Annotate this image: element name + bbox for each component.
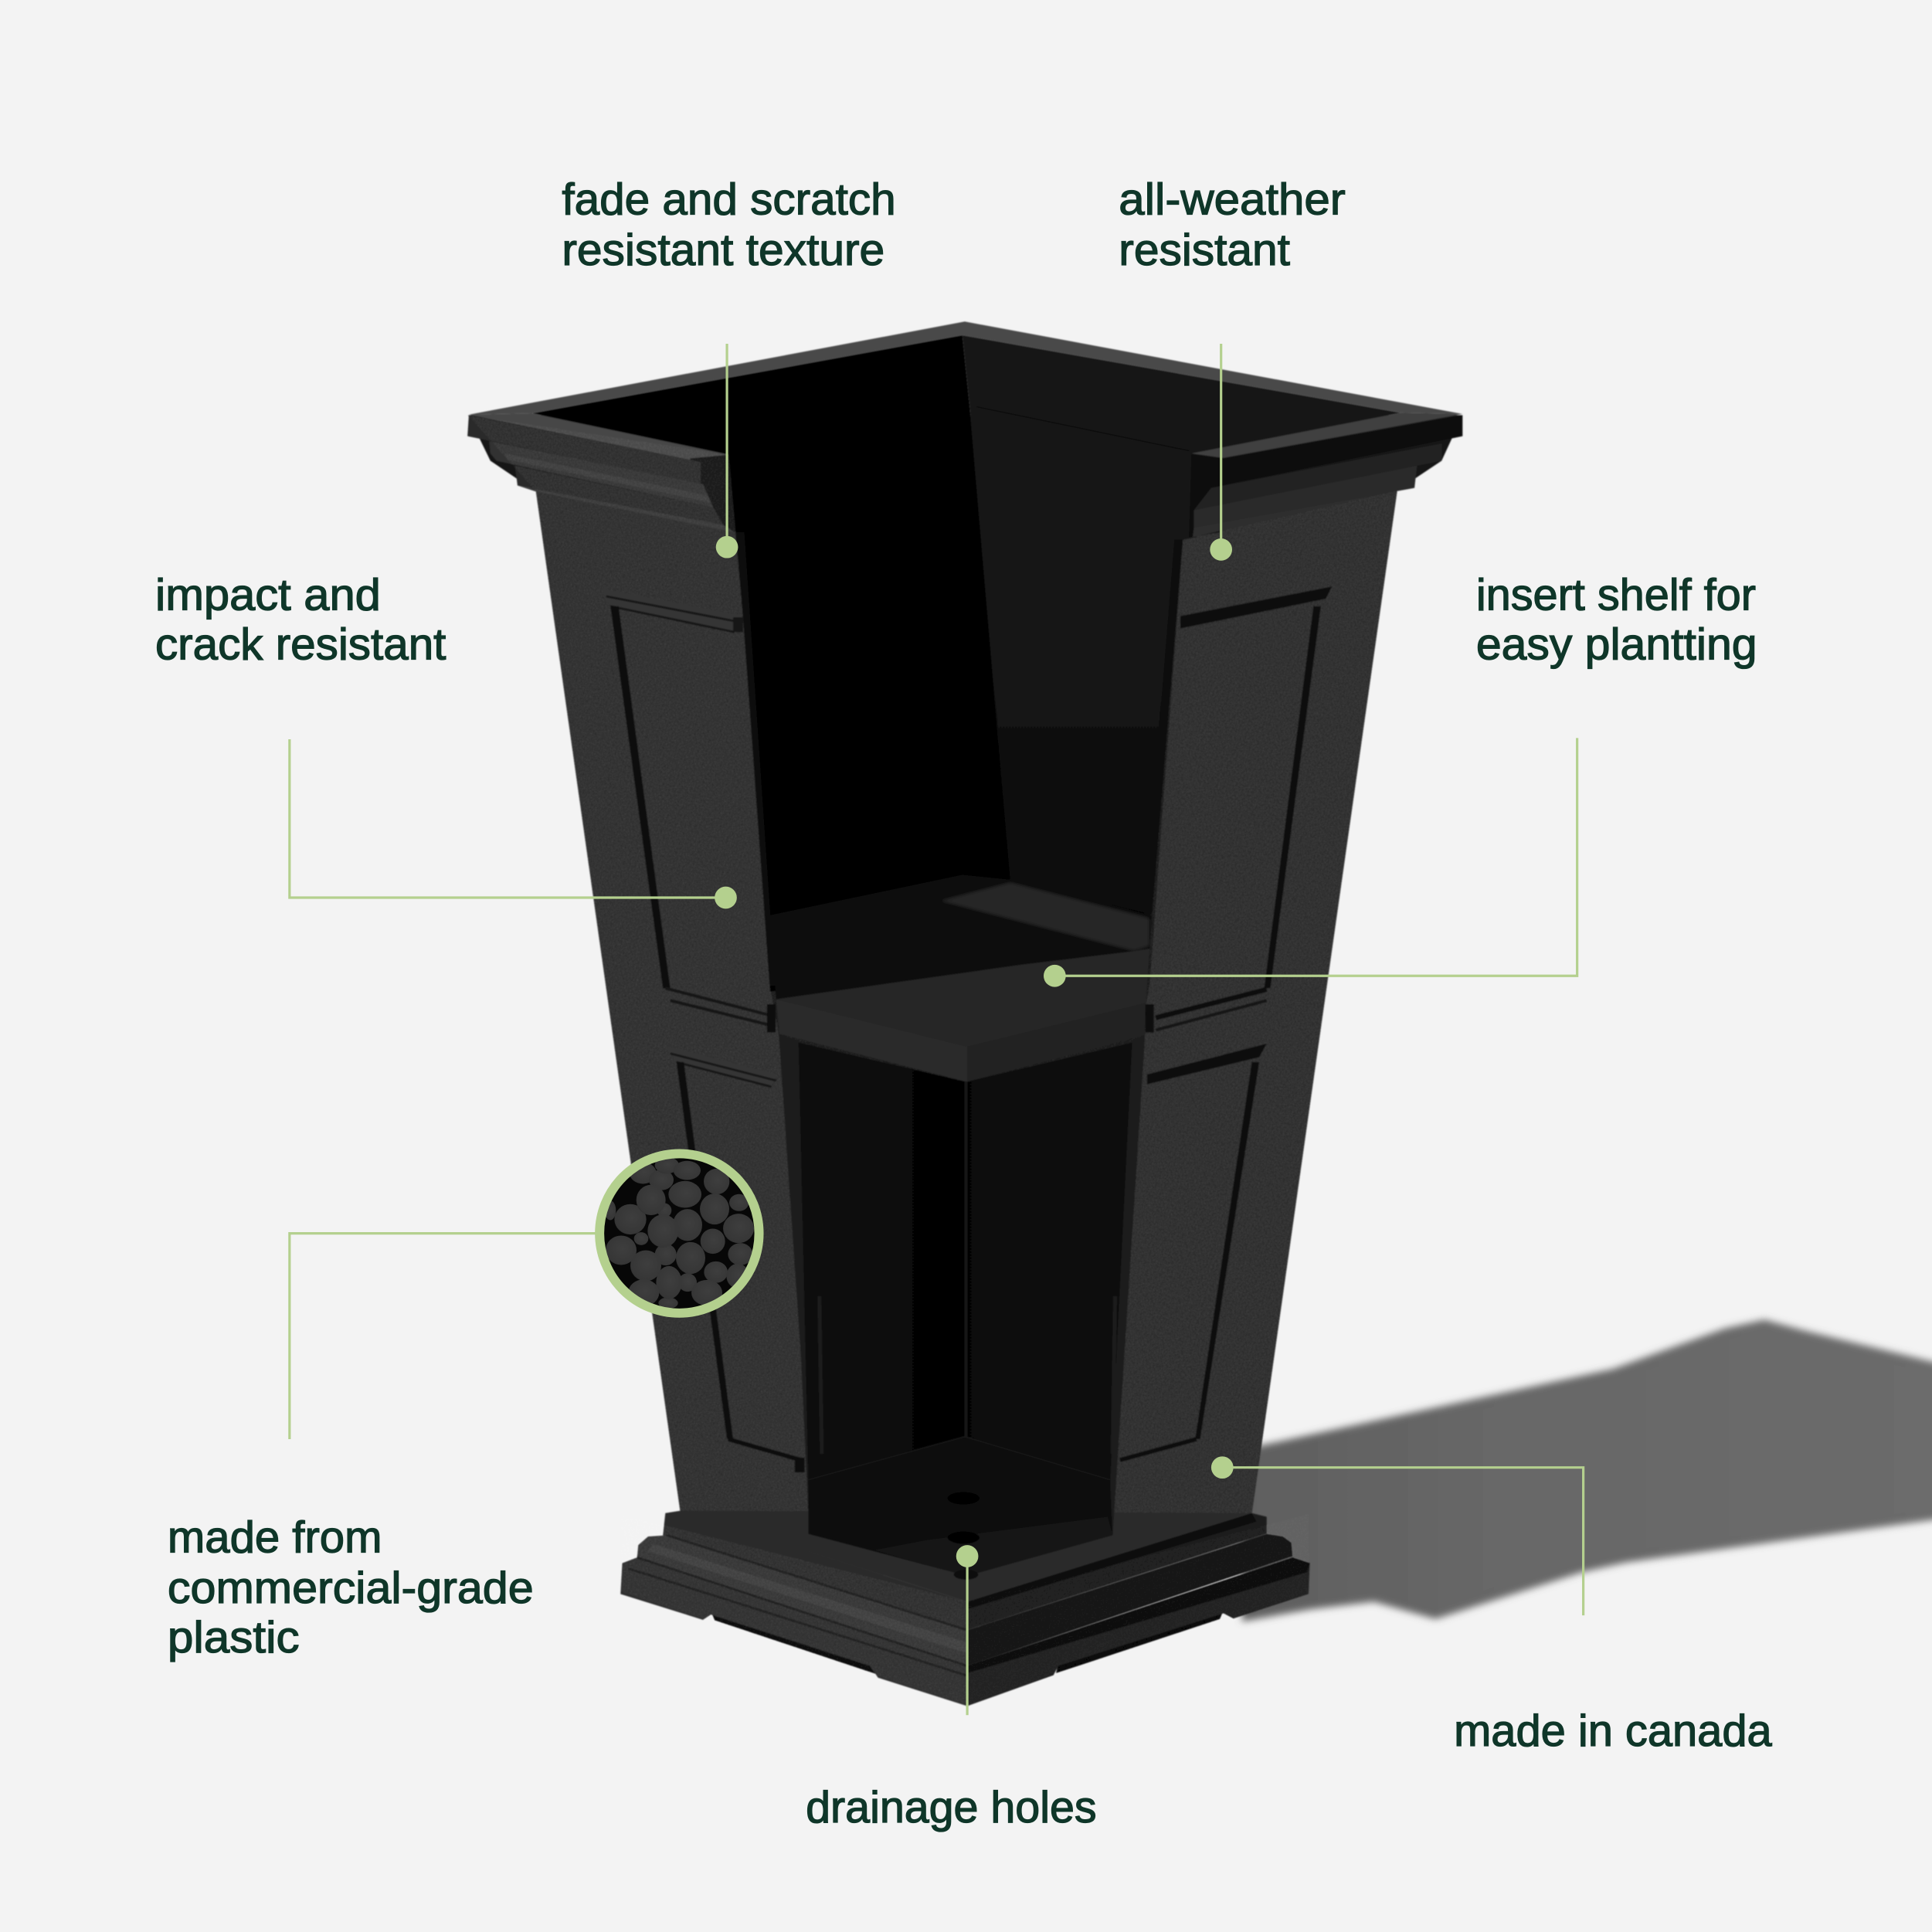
callout: insert shelf (1044, 571, 1757, 987)
groove (1195, 1062, 1259, 1439)
base right tier 2 (967, 1534, 1292, 1665)
callout: drainage holes (806, 1545, 1097, 1832)
lower interior (779, 1034, 1145, 1580)
shelf notches (771, 1004, 1149, 1033)
rim left top (469, 413, 728, 462)
lower cut edge right (1110, 1035, 1145, 1535)
dot (1044, 965, 1066, 987)
bottom lines (1156, 990, 1267, 1017)
label: resistant (1119, 226, 1290, 275)
lower back left wall (799, 1042, 966, 1485)
base right tier 1 (967, 1513, 1267, 1630)
label: fade and scratch (562, 175, 896, 225)
leader line (1054, 738, 1577, 976)
rim right top (1191, 413, 1462, 463)
label (562, 175, 896, 275)
shelf top shadowed (769, 874, 1152, 1047)
leader line (1221, 344, 1222, 549)
left cut edge (735, 532, 775, 986)
callout: commercial-grade plastic (168, 1153, 759, 1662)
leader line (726, 344, 728, 547)
shelf front left edge (776, 1000, 967, 1081)
moulding left (489, 441, 714, 508)
left upper panel (601, 589, 770, 1025)
vertical ribs (820, 1296, 1115, 1454)
drainage hole back (948, 1492, 980, 1505)
rim right cut profile (1189, 453, 1226, 537)
rim grain (468, 416, 735, 532)
bottom lines (665, 988, 770, 1025)
label: drainage holes (806, 1783, 1097, 1832)
rail (601, 589, 741, 632)
groove (677, 1062, 733, 1439)
cavity floor (808, 1437, 1112, 1576)
callout: impact and crack resistant (155, 571, 737, 908)
rim left cut profile (690, 455, 735, 532)
right cut edge (1145, 540, 1183, 915)
cast shadow (1242, 1319, 1932, 1621)
label: easy plantting (1476, 620, 1757, 669)
base left tier 2 (637, 1535, 967, 1665)
dot (716, 536, 738, 559)
interior left dark wall (532, 335, 1152, 992)
leader line (966, 1557, 968, 1715)
label: resistant texture (562, 226, 885, 275)
dot (1211, 1456, 1234, 1479)
label (168, 1513, 534, 1662)
rim back top (469, 321, 1462, 415)
leader line (290, 739, 725, 898)
bottom lines (728, 1439, 801, 1460)
label: commercial-grade (168, 1564, 534, 1613)
rail (1147, 1044, 1267, 1085)
label: all-weather (1119, 175, 1346, 225)
moulding right (1194, 443, 1441, 510)
leader line (290, 1234, 596, 1439)
callout: fade and scratch resistant texture (562, 175, 896, 559)
label (1476, 571, 1757, 669)
dot (956, 1545, 978, 1567)
label: crack resistant (155, 620, 446, 669)
base left tier 1 (663, 1511, 967, 1630)
shelf front right edge (967, 1003, 1146, 1081)
label (1119, 175, 1346, 275)
magnified pellets lens (599, 1153, 759, 1313)
body: left face (536, 491, 967, 1602)
label: made in canada (1454, 1706, 1772, 1756)
insert shelf (769, 874, 1152, 1081)
body: right face (967, 491, 1397, 1602)
interior right wall (963, 335, 1401, 915)
callout: made in canada (1211, 1456, 1772, 1756)
upper interior (532, 335, 1401, 992)
planter cutaway (467, 321, 1462, 1706)
drainage hole front (948, 1532, 980, 1544)
label: plastic (168, 1613, 300, 1662)
label: made from (168, 1513, 382, 1563)
dot (1210, 538, 1232, 561)
shelf top lit back (939, 882, 1149, 951)
label: impact and (155, 571, 381, 620)
left lower panel (667, 1046, 805, 1472)
corner seam (966, 1081, 967, 1437)
leader line (1222, 1468, 1584, 1615)
rail (1180, 586, 1332, 628)
bottom lines (1120, 1439, 1197, 1460)
label: insert shelf for (1476, 571, 1756, 620)
lower cut edge left (779, 1034, 810, 1534)
groove (610, 606, 671, 988)
rail end (733, 617, 743, 632)
pellets (605, 1157, 754, 1309)
base right tier 3 (967, 1557, 1310, 1706)
groove (1264, 606, 1321, 988)
right lower panel (1120, 1044, 1267, 1460)
rim right face (1194, 416, 1462, 488)
body texture (536, 491, 1397, 1513)
lens ring (599, 1153, 759, 1313)
rim (467, 321, 1462, 537)
label (155, 571, 446, 669)
base grain (621, 1514, 967, 1706)
body underlay (468, 416, 1462, 1602)
lower back right wall (966, 1042, 1132, 1485)
rail (667, 1046, 776, 1087)
shelf top lit front (776, 949, 1149, 1047)
base left tier 3 (620, 1557, 967, 1706)
gap under base right (1056, 1611, 1224, 1673)
gap under base left (711, 1611, 878, 1675)
dot (715, 887, 737, 908)
rim left face (467, 416, 701, 484)
base plinth (620, 1511, 1310, 1706)
right upper panel (1156, 586, 1332, 1030)
callout: all-weather resistant (1119, 175, 1346, 561)
drainage knob (954, 1570, 978, 1580)
lens background (600, 1155, 758, 1312)
